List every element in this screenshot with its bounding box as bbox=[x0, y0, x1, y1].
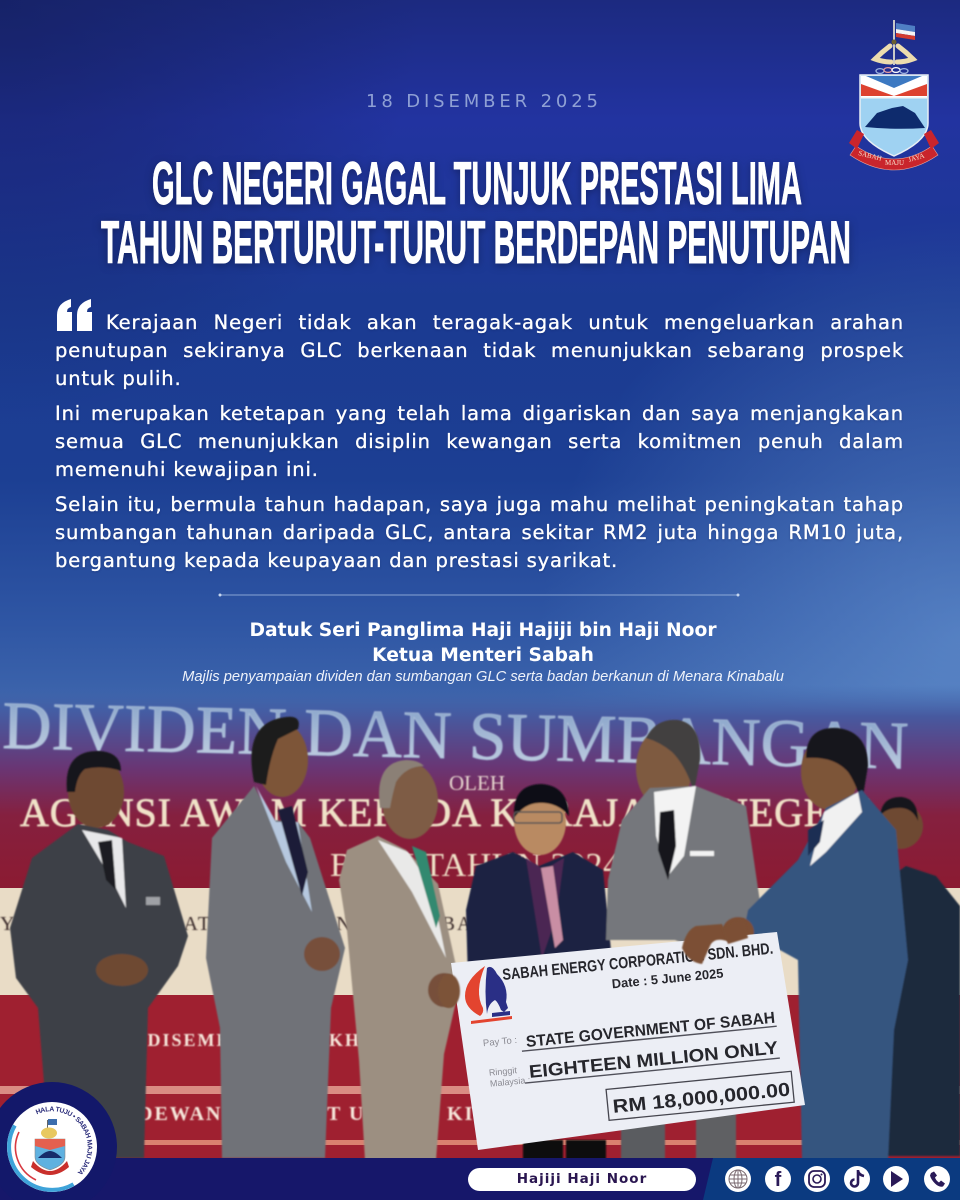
quote paragraph 3: bergantung kepada keupayaan dan prestasi syarikat. bbox=[55, 549, 618, 572]
crest ribbon: SABAH bbox=[858, 149, 882, 163]
person 4 bbox=[466, 784, 611, 1160]
quote paragraph 3 bbox=[55, 493, 904, 572]
cheque: STATE GOVERNMENT OF SABAH bbox=[525, 1010, 776, 1051]
icon: phone bbox=[924, 1166, 950, 1192]
crest shield bbox=[860, 75, 928, 156]
quote paragraph 1: Kerajaan Negeri tidak akan teragak-agak untuk mengeluarkan arahan bbox=[106, 311, 904, 334]
quote paragraph 2 bbox=[55, 402, 904, 481]
person 1 bbox=[10, 751, 188, 1158]
event backdrop screen: DEWAN BANQUET UTAMA, KINABALU bbox=[138, 1103, 571, 1125]
person 6 bbox=[744, 728, 908, 1160]
Sabah state crest bbox=[849, 20, 939, 170]
crest ribbon bbox=[849, 130, 939, 170]
cheque company name: SABAH ENERGY CORPORATION SDN. BHD. bbox=[502, 941, 774, 984]
event backdrop screen: OLEH bbox=[449, 771, 505, 795]
footer social icons bbox=[725, 1166, 950, 1192]
person 2 bbox=[206, 717, 345, 1158]
event caption: Majlis penyampaian dividen dan sumbangan GLC serta badan berkanun di Menara Kinabalu bbox=[182, 669, 784, 685]
event backdrop screen: 8 DISEMBER 2025 | KHAS bbox=[130, 1030, 388, 1050]
cheque: EIGHTEEN MILLION ONLY bbox=[528, 1038, 779, 1082]
quote paragraph 1: penutupan sekiranya GLC berkenaan tidak menunjukkan sebarang prospek bbox=[55, 339, 904, 362]
mini crest bbox=[31, 1119, 69, 1175]
crest arms bbox=[875, 40, 913, 62]
cheque: RM 18,000,000.00 bbox=[612, 1080, 791, 1118]
icon: facebook bbox=[765, 1166, 791, 1192]
crest ribbon: JAYA bbox=[907, 152, 925, 164]
speaker title: Ketua Menteri Sabah bbox=[372, 645, 594, 666]
person 3 bbox=[339, 760, 460, 1160]
quote paragraph 1 bbox=[55, 311, 904, 390]
icon: facebook: f bbox=[775, 1169, 782, 1191]
cheque: Pay To : bbox=[482, 1035, 518, 1049]
icon: tiktok bbox=[844, 1166, 870, 1192]
speaker name: Datuk Seri Panglima Haji Hajiji bin Haji Noor bbox=[249, 620, 717, 641]
circular logo badge bbox=[0, 1082, 117, 1192]
title bbox=[101, 150, 851, 276]
footer name pill: Hajiji Haji Noor bbox=[517, 1171, 647, 1187]
event backdrop screen: YANG BERHORMAT KETUA MENTERI SABAH bbox=[0, 913, 490, 935]
crest flag bbox=[893, 20, 915, 65]
icon: globe bbox=[725, 1166, 751, 1192]
quotation mark icon bbox=[57, 299, 92, 331]
event backdrop screen: KE bbox=[310, 945, 337, 967]
event backdrop screen: DIVIDEN DAN SUMBANGAN bbox=[2, 687, 909, 784]
footer bar bbox=[0, 1158, 960, 1200]
hands on cheque bbox=[666, 917, 754, 947]
event backdrop screen: BAGI TAHUN 2024 bbox=[330, 847, 620, 884]
cheque flame logo bbox=[465, 966, 512, 1024]
event backdrop screen: AGENSI AWAM KEPADA KERAJAAN NEGERI bbox=[20, 790, 870, 835]
event backdrop screen bbox=[0, 685, 960, 1160]
crest ribbon: MAJU bbox=[885, 159, 904, 167]
quote paragraph 2: semua GLC menunjukkan disiplin kewangan serta komitmen penuh dalam bbox=[55, 430, 904, 453]
date: 18 DISEMBER 2025 bbox=[366, 91, 598, 112]
divider line bbox=[218, 594, 740, 596]
icon: play bbox=[883, 1166, 909, 1192]
person 5 bbox=[606, 720, 762, 1160]
quote paragraph 2: memenuhi kewajipan ini. bbox=[55, 458, 319, 481]
footer name pill bbox=[468, 1168, 696, 1191]
cheque bbox=[438, 918, 805, 1150]
cheque: Date : 5 June 2025 bbox=[611, 966, 724, 991]
circular logo badge: HALA TUJU • SABAH MAJU JAYA bbox=[36, 1106, 92, 1174]
quote paragraph 2: Ini merupakan ketetapan yang telah lama digariskan dan saya menjangkakan bbox=[55, 402, 904, 425]
cheque: Malaysia : bbox=[489, 1075, 531, 1089]
quote paragraph 3: sumbangan tahunan daripada GLC, antara sekitar RM2 juta hingga RM10 juta, bbox=[55, 521, 904, 544]
person far right bbox=[877, 797, 960, 1156]
icon: instagram bbox=[804, 1166, 830, 1192]
cheque: Ringgit bbox=[488, 1065, 518, 1078]
quote paragraph 1: untuk pulih. bbox=[55, 367, 182, 390]
quote paragraph 3: Selain itu, bermula tahun hadapan, saya juga mahu melihat peningkatan tahap bbox=[55, 493, 904, 516]
people group bbox=[10, 717, 960, 1160]
